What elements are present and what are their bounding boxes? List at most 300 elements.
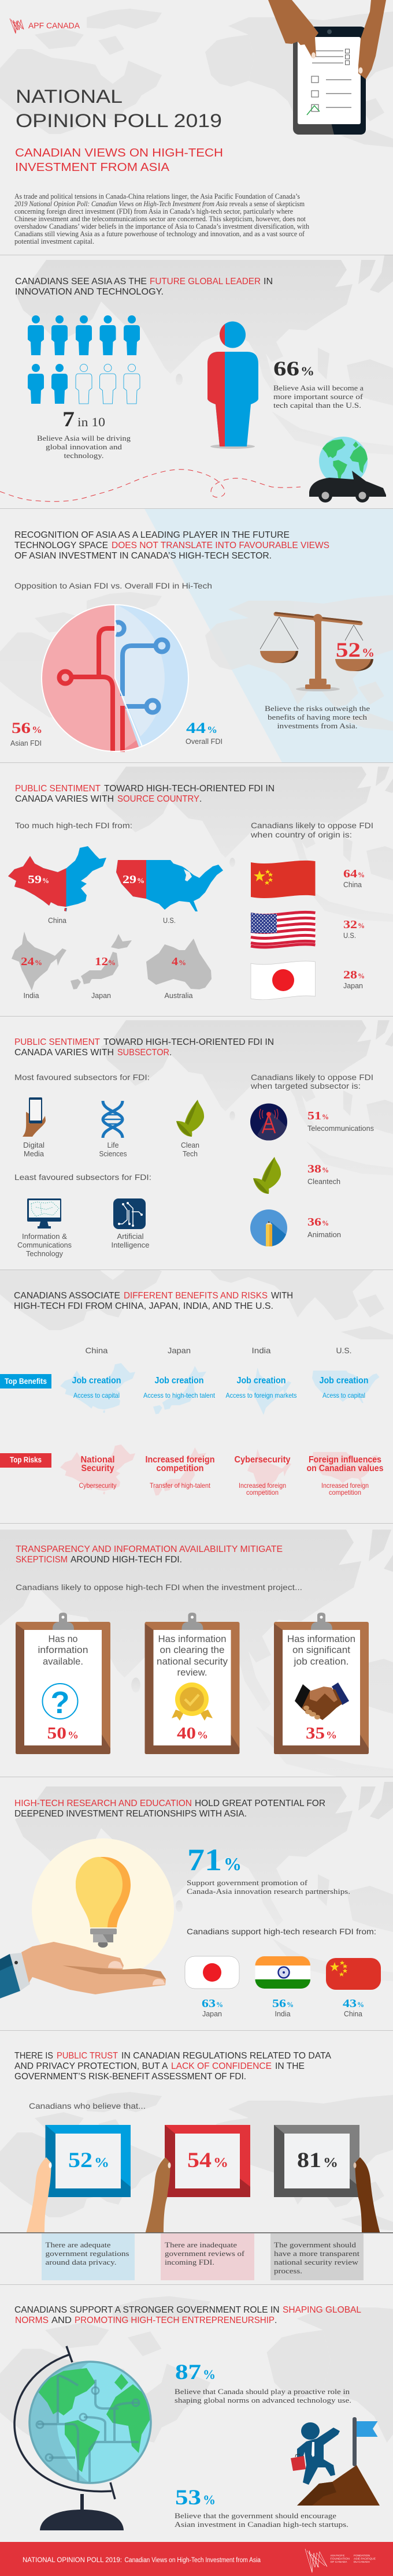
flag: China [251, 861, 316, 898]
stat: animation 36 percent: Animation [307, 1230, 341, 1239]
risks: U.S.: competition [329, 1488, 361, 1497]
heading: public trust: AND PRIVACY PROTECTION, BUT A [14, 2061, 168, 2071]
heading: global norms: SHAPING GLOBAL [283, 2305, 361, 2315]
clipboard: national security review: Has information [158, 1633, 227, 1644]
stat: 71 percent: % [224, 1853, 242, 1874]
heading: global norms: PROMOTING HIGH-TECH ENTREPRENEURSHIP [75, 2316, 275, 2325]
pie label: Overall FDI: 44 [186, 720, 206, 736]
caption box: FDI reviews: government reviews of [165, 2249, 245, 2258]
risks: Japan: competition [156, 1464, 203, 1473]
subtitle: INVESTMENT FROM ASIA [15, 161, 170, 174]
subheading: least favoured: Least favoured subsectors for FDI: [14, 1172, 151, 1182]
map: India 24 percent [12, 932, 66, 1000]
benefits: U.S.: Acess to capital [322, 1391, 365, 1399]
intro paragraph [14, 192, 309, 245]
stat: telecommunications 51 percent: % [322, 1112, 329, 1121]
subtitle [15, 147, 223, 174]
clipboard: national security review: review. [177, 1667, 207, 1678]
heading: benefits and risks: WITH [271, 1291, 293, 1301]
title: NATIONAL [16, 86, 123, 107]
stat: China 64 percent: China [343, 880, 362, 889]
icon: life sciences: Sciences [99, 1149, 127, 1158]
clipboard: no information: information [38, 1644, 88, 1655]
clipboard: national security review: % [197, 1729, 208, 1741]
stat: U.S. 32 percent: % [358, 921, 365, 930]
heading: global norms: CANADIANS SUPPORT A STRONGER GOVERNMENT ROLE IN [14, 2305, 280, 2315]
risks: China: Security [81, 1464, 114, 1473]
icon: car carrying globe [309, 437, 386, 502]
caption box: transparent review [270, 2233, 364, 2280]
icon: large person 66 percent [207, 321, 258, 449]
flag: China rounded: China [344, 2009, 363, 2018]
clipboard: job creation [274, 1613, 369, 1754]
icon: cleantech leaf [253, 1157, 281, 1194]
caption box: data privacy: There are adequate [45, 2240, 111, 2249]
stat: Japan 28 percent [343, 969, 365, 990]
clipboard: national security review [144, 1613, 239, 1754]
stat: 7 in 10: technology. [64, 451, 104, 460]
background map: section 8 [15, 1782, 393, 1930]
map: Japan 12 percent: 12 [95, 955, 108, 968]
map: Australia 4 percent: 4 [172, 955, 178, 968]
benefits: China [72, 1376, 121, 1399]
stat: 87 percent: 87 [175, 2361, 201, 2384]
subheading: oppose by subsector [250, 1073, 373, 1090]
heading: recognition of Asia [14, 530, 329, 561]
icon: lightbulb in hand [0, 1838, 174, 1998]
map: Australia 4 percent [146, 939, 212, 1000]
stat: animation 36 percent [307, 1216, 341, 1239]
column headers: India [252, 1346, 271, 1355]
stat: U.S. 32 percent [343, 918, 365, 940]
map: Japan 12 percent: Japan [91, 991, 111, 1000]
pie label: Overall FDI [186, 720, 223, 746]
footer logo: ASIE PACIFIQUE [354, 2558, 376, 2561]
heading: source country: CANADA VARIES WITH [15, 794, 114, 804]
heading: public trust: GOVERNMENT’S RISK-BENEFIT ASSESSMENT OF FDI. [14, 2072, 246, 2082]
pie label: Overall FDI: Overall FDI [186, 737, 223, 746]
dashed travel path [0, 470, 301, 501]
clipboard: no information: % [68, 1729, 79, 1741]
benefits: India: Access to foreign markets [225, 1391, 297, 1399]
heading: benefits and risks [14, 1291, 293, 1311]
intro paragraph: Canadians still viewing Asia as a future powerhouse of technology and innovation, and as a vast source of [14, 229, 305, 238]
background map: section 3 [0, 593, 393, 731]
heading: research and education: HIGH-TECH RESEARCH AND EDUCATION [14, 1799, 192, 1808]
heading: future global leader: INNOVATION AND TECHNOLOGY. [15, 287, 164, 297]
caption box: FDI reviews [161, 2233, 254, 2280]
heading: recognition of Asia: DOES NOT TRANSLATE INTO FAVOURABLE VIEWS [112, 541, 329, 550]
subheading: investment project: Canadians likely to oppose high-tech FDI when the investment project... [16, 1583, 302, 1592]
heading: subsector: PUBLIC SENTIMENT [14, 1037, 101, 1047]
background map: section 2 [15, 255, 393, 404]
sign: 54 percent with hand [146, 2125, 250, 2233]
subheading: support by country: Canadians support high-tech research FDI from: [187, 1927, 376, 1936]
subheading: oppose by country: Canadians likely to oppose FDI [251, 821, 373, 830]
circuit: red lines [59, 628, 123, 752]
risks: India: Cybersecurity [235, 1455, 291, 1465]
pie chart: 56 vs 44 [41, 604, 189, 752]
clipboard: no information: 50 [47, 1725, 66, 1743]
column headers: China [86, 1346, 108, 1355]
clipboard: national security review: on clearing the [160, 1644, 224, 1655]
stat: telecommunications 51 percent: 51 [307, 1110, 321, 1122]
flag: Japan [251, 961, 316, 1000]
stat: 53 percent: % [203, 2493, 216, 2507]
row label: top benefits [0, 1374, 51, 1388]
heading: source country: TOWARD HIGH-TECH-ORIENTED FDI IN [104, 784, 275, 794]
icon: information technology: Communications [17, 1241, 72, 1249]
icon: clean tech [176, 1100, 204, 1158]
risks: U.S.: on Canadian values [306, 1464, 384, 1473]
pie label: Asian FDI: 56 [12, 720, 31, 736]
caption box: transparent review: have a more transparent [274, 2249, 359, 2258]
clipboard: job creation: Has information [287, 1633, 355, 1644]
heading: transparency: AROUND HIGH-TECH FDI. [71, 1555, 182, 1565]
stat: cleantech 38 percent: Cleantech [307, 1177, 340, 1186]
map: Australia 4 percent: % [179, 958, 186, 967]
heading: transparency: SKEPTICISM [16, 1555, 68, 1565]
footer band: Canadian Views on High-Tech Investment from Asia [125, 2557, 261, 2564]
icon: life sciences [99, 1101, 127, 1158]
background map: section 7 [0, 1529, 393, 1713]
stat: telecommunications 51 percent: Telecommunications [307, 1124, 374, 1133]
map: China 59 percent: China [48, 916, 67, 925]
benefits: India [225, 1376, 297, 1399]
benefits: Japan: Access to high-tech talent [143, 1391, 216, 1399]
icon: digital media [23, 1097, 46, 1158]
risks: India: competition [246, 1488, 279, 1497]
heading: future global leader: IN [264, 277, 273, 286]
icon: digital media: Digital [23, 1141, 45, 1149]
map: India 24 percent: India [23, 991, 39, 1000]
map: India 24 percent: 24 [21, 955, 34, 968]
heading: research and education [14, 1799, 325, 1819]
icon: artificial intelligence [111, 1198, 149, 1249]
heading: recognition of Asia: OF ASIAN INVESTMENT IN CANADA’S HIGH-TECH SECTOR. [14, 551, 272, 561]
heading: research and education: DEEPENED INVESTMENT RELATIONSHIPS WITH ASIA. [14, 1809, 247, 1819]
icon: clean tech: Clean [181, 1141, 199, 1149]
stat: 66 percent: tech capital than the U.S. [273, 401, 361, 410]
subheading: oppose by subsector: Canadians likely to oppose FDI [251, 1073, 373, 1082]
map: U.S. 29 percent: 29 [123, 873, 136, 886]
row label: top risks: Top Risks [10, 1455, 42, 1464]
benefits: India: Job creation [237, 1376, 286, 1386]
stat: 87 percent: shaping global norms on advanced technology use. [175, 2396, 351, 2404]
heading: subsector: SUBSECTOR [117, 1048, 169, 1058]
stat: U.S. 32 percent: 32 [343, 918, 357, 931]
risks: Japan [146, 1455, 215, 1490]
row label: top benefits: Top Benefits [5, 1377, 47, 1386]
heading: source country: SOURCE COUNTRY [117, 794, 199, 804]
flag: India rounded: India [275, 2009, 291, 2018]
stat: 52 percent risks [265, 638, 375, 730]
heading: global norms: AND [51, 2316, 72, 2325]
heading: future global leader: FUTURE GLOBAL LEADER [150, 277, 261, 286]
heading: subsector: . [169, 1048, 172, 1058]
heading: public trust: THERE IS [14, 2051, 53, 2061]
heading: subsector: TOWARD HIGH-TECH-ORIENTED FDI IN [103, 1037, 274, 1047]
risks: Japan: Transfer of high-talent [150, 1481, 211, 1490]
stat: 71 percent: Support government promotion of [187, 1878, 308, 1887]
sign: 52 percent with hand: 52 [68, 2149, 92, 2172]
pie label: Asian FDI [10, 720, 42, 747]
stat: 53 percent [175, 2486, 348, 2529]
caption box: data privacy: around data privacy. [45, 2258, 117, 2266]
icon group: 7 in 10 people [28, 315, 140, 404]
stat: 66 percent: more important source of [273, 392, 364, 401]
clipboard: no information: ? [51, 1685, 69, 1720]
footer band: NATIONAL OPINION POLL 2019: [23, 2557, 122, 2564]
clipboard: no information [16, 1613, 110, 1754]
intro paragraph: 2019 National Opinion Poll: Canadian Views on High-Tech Investment from Asia reveals a sense of skepticism [14, 199, 305, 208]
stat: 7 in 10 [37, 408, 131, 460]
flag: India rounded: % [287, 2000, 294, 2009]
map: China 59 percent: 59 [28, 873, 42, 886]
map: India 24 percent: % [35, 958, 42, 967]
stat: Japan 28 percent: 28 [343, 969, 357, 981]
risks: India [235, 1455, 291, 1497]
footer logo: DU CANADA [354, 2560, 370, 2564]
heading: research and education: HOLD GREAT POTENTIAL FOR [195, 1799, 325, 1808]
caption box: data privacy: government regulations [45, 2249, 129, 2258]
stat: 71 percent: Canada-Asia innovation research partnerships. [187, 1887, 350, 1896]
clipboard: national security review: national security [157, 1656, 228, 1667]
stat: U.S. 32 percent: U.S. [343, 931, 356, 940]
background map: section 4 [101, 767, 393, 880]
map: Australia 4 percent: Australia [164, 991, 193, 1000]
intro paragraph: As trade and political tensions in Canada-China relations linger, the Asia Pacific Foundation of Canada’s [14, 192, 300, 200]
stat: cleantech 38 percent: % [322, 1166, 329, 1174]
heading: recognition of Asia: TECHNOLOGY SPACE [14, 541, 108, 550]
heading: public trust: IN CANADIAN REGULATIONS RELATED TO DATA [121, 2051, 332, 2061]
sign: 81 percent with hand: % [323, 2156, 338, 2171]
stat: cleantech 38 percent: 38 [307, 1163, 321, 1175]
logo: APF Canada: APF CANADA [28, 21, 80, 30]
flag: Japan rounded: Japan [202, 2009, 222, 2018]
panel: blue diagonal background [144, 509, 393, 762]
flag: U.S. [251, 911, 316, 948]
stat: 52 percent risks: 52 [336, 638, 361, 661]
stat: 53 percent: 53 [175, 2486, 201, 2510]
icon: telecommunications tower [250, 1103, 287, 1140]
map: Japan 12 percent [71, 934, 132, 1000]
subheading: most favoured: Most favoured subsectors for FDI: [14, 1073, 150, 1082]
chart subtitle: Opposition to Asian FDI vs. Overall FDI in Hi-Tech [14, 581, 212, 590]
stat: China 64 percent: % [358, 870, 365, 879]
stat: 71 percent: 71 [187, 1842, 222, 1877]
stat: 7 in 10: in 10 [77, 415, 105, 429]
map: U.S. 29 percent [116, 860, 223, 925]
icon: information technology [17, 1198, 72, 1258]
footer logo: ASIA PACIFIC [331, 2554, 345, 2558]
pie label: Asian FDI: Asian FDI [10, 739, 42, 747]
footer logo: FOUNDATION [331, 2558, 350, 2561]
map: Japan 12 percent: % [108, 958, 116, 967]
caption box: transparent review: national security review [274, 2258, 359, 2266]
icon: clean tech: Tech [183, 1149, 198, 1158]
benefits: U.S.: Job creation [319, 1376, 369, 1386]
heading: public trust: PUBLIC TRUST [57, 2051, 118, 2061]
circuit lines on globe [38, 2376, 139, 2484]
clipboard: job creation: job creation. [293, 1656, 349, 1667]
background map: section 5 [101, 1020, 393, 1133]
stat: 52 percent risks: Believe the risks outweigh the [265, 704, 370, 713]
stat: 87 percent [175, 2361, 351, 2404]
subheading: oppose by subsector: when targeted subsector is: [250, 1081, 361, 1090]
column headers [86, 1346, 351, 1355]
flag: Japan rounded [185, 1956, 239, 2018]
flag: China rounded: 43 [343, 1997, 357, 2010]
intro paragraph: potential investment capital. [14, 237, 94, 245]
flag: Japan rounded: % [216, 2000, 223, 2009]
stat: 52 percent risks: % [362, 646, 375, 660]
title [16, 86, 222, 131]
intro paragraph: overshadow Canadians’ wider beliefs in the importance of Asia to Canada’s investment diversification, with [14, 222, 309, 230]
icon: animation pencil [250, 1209, 287, 1246]
sign: 54 percent with hand: % [213, 2156, 228, 2171]
stat: 7 in 10: global innovation and [46, 442, 123, 451]
sign: 52 percent with hand [27, 2125, 131, 2233]
clipboard: no information: Has no [49, 1633, 77, 1644]
stat: 52 percent risks: benefits of having more tech [268, 713, 368, 721]
benefits: Japan [143, 1376, 216, 1399]
clipboard: national security review: 40 [177, 1725, 196, 1743]
caption box: transparent review: process. [274, 2266, 302, 2275]
clipboard: no information: available. [43, 1656, 83, 1667]
footer logo [305, 2549, 376, 2573]
risks: China: National [81, 1455, 114, 1465]
heading: source country [15, 784, 275, 804]
map: U.S. 29 percent: % [137, 876, 144, 885]
heading: benefits and risks: HIGH-TECH FDI FROM CHINA, JAPAN, INDIA, AND THE U.S. [14, 1301, 273, 1311]
flag: India rounded [255, 1956, 311, 2018]
stat: 66 percent [273, 357, 364, 410]
flag: China rounded: % [357, 2000, 364, 2009]
benefits: U.S. [319, 1376, 369, 1399]
stat: 53 percent: Believe that the government should encourage [175, 2511, 336, 2520]
footer logo: OF CANADA [331, 2560, 347, 2564]
clipboard: job creation: 35 [306, 1725, 325, 1743]
map: China 59 percent: % [42, 876, 49, 885]
sign: 81 percent with hand: 81 [297, 2149, 321, 2172]
stat: 66 percent: % [301, 364, 314, 378]
heading: source country: PUBLIC SENTIMENT [15, 784, 101, 794]
caption box: FDI reviews: incoming FDI. [165, 2258, 214, 2266]
map: U.S. 29 percent: U.S. [163, 916, 176, 925]
logo: APF Canada [10, 18, 80, 33]
title: OPINION POLL 2019 [16, 110, 222, 131]
stat: 52 percent risks: investments from Asia. [277, 721, 357, 730]
stat: telecommunications 51 percent [307, 1110, 374, 1133]
subheading: oppose by country [250, 821, 373, 839]
risks: U.S.: Increased foreign [321, 1481, 369, 1490]
pie label: Asian FDI: % [32, 724, 42, 735]
stat: China 64 percent: 64 [343, 868, 357, 880]
background map: header [0, 9, 393, 147]
icon: artificial intelligence: Artificial [117, 1232, 144, 1241]
icon: balance scale [260, 613, 373, 691]
circuit: blue lines [116, 623, 168, 713]
background map: section 9 [0, 2092, 393, 2231]
heading: future global leader: CANADIANS SEE ASIA AS THE [15, 277, 147, 286]
icon: tablet with survey and hands [268, 0, 386, 135]
stat: Japan 28 percent: Japan [343, 981, 363, 990]
sign: 52 percent with hand: % [94, 2156, 109, 2171]
heading: global norms: . [275, 2316, 277, 2325]
map: China 59 percent [8, 846, 106, 925]
stat: Japan 28 percent: % [358, 971, 365, 980]
heading: global norms: NORMS [15, 2316, 49, 2325]
benefits: China: Access to capital [73, 1391, 120, 1399]
caption box: FDI reviews: There are inadequate [165, 2240, 237, 2249]
icon: information technology: Technology [26, 1249, 63, 1258]
intro paragraph: Chinese investment and the telecommunications sector are concerned. This skepticism, however, does not [14, 214, 306, 223]
column headers: Japan [168, 1346, 191, 1355]
stat: cleantech 38 percent [307, 1163, 340, 1186]
heading: public trust [14, 2051, 332, 2082]
heading: public trust: IN THE [275, 2061, 305, 2071]
pie label: Overall FDI: % [207, 724, 217, 735]
stat: 87 percent: % [203, 2367, 216, 2382]
caption box: transparent review: The government should [274, 2240, 357, 2249]
heading: transparency: TRANSPARENCY AND INFORMATION AVAILABILITY MITIGATE [16, 1544, 283, 1554]
heading: subsector [14, 1037, 274, 1058]
faint maps: risks row [60, 1445, 380, 1497]
benefits: China: Job creation [72, 1376, 121, 1386]
stat: 53 percent: Asian investment in Canadian high-tech startups. [175, 2520, 348, 2529]
stat: 71 percent [187, 1842, 350, 1896]
clipboard: job creation: on significant [292, 1644, 350, 1655]
heading: benefits and risks: DIFFERENT BENEFITS AND RISKS [124, 1291, 268, 1301]
risks: Japan: Increased foreign [146, 1455, 215, 1465]
clipboard: job creation: % [326, 1729, 337, 1741]
stat: 7 in 10: 7 [62, 408, 75, 431]
background map: section 10 [0, 2296, 393, 2443]
heading: benefits and risks: CANADIANS ASSOCIATE [14, 1291, 120, 1301]
caption box: data privacy [42, 2233, 135, 2280]
flag: Japan rounded: 63 [202, 1997, 216, 2010]
risks: U.S. [306, 1455, 384, 1497]
stat: 66 percent: Believe Asia will become a [273, 384, 364, 392]
column headers: U.S. [336, 1346, 351, 1355]
heading: future global leader [15, 277, 273, 297]
row label: top risks [0, 1453, 51, 1468]
sign: 81 percent with hand [274, 2125, 380, 2233]
flag: India rounded: 56 [272, 1997, 286, 2010]
stat: China 64 percent [343, 868, 365, 889]
icon: artificial intelligence: Intelligence [111, 1241, 149, 1249]
benefits: Japan: Job creation [155, 1376, 203, 1386]
heading: source country: . [199, 794, 202, 804]
icon: life sciences: Life [107, 1141, 119, 1149]
footer band [0, 2542, 393, 2576]
intro paragraph: concerning foreign direct investment (FDI) from Asia in Canada’s high-tech sector, particularly where [14, 207, 293, 215]
stat: 66 percent: 66 [273, 357, 299, 380]
risks: U.S.: Foreign influences [309, 1455, 381, 1465]
icon: desk globe [14, 2346, 151, 2530]
heading: transparency [16, 1544, 283, 1565]
risks: China: Cybersecurity [79, 1481, 117, 1490]
heading: subsector: CANADA VARIES WITH [14, 1048, 114, 1058]
stat: animation 36 percent: 36 [307, 1216, 321, 1229]
flag: China rounded [326, 1958, 381, 2018]
heading: recognition of Asia: RECOGNITION OF ASIA AS A LEADING PLAYER IN THE FUTURE [14, 530, 290, 540]
icon: digital media: Media [24, 1149, 45, 1158]
heading: public trust: LACK OF CONFIDENCE [171, 2061, 272, 2071]
heading: global norms [14, 2305, 361, 2325]
subheading: too much FDI: Too much high-tech FDI from: [15, 821, 132, 830]
